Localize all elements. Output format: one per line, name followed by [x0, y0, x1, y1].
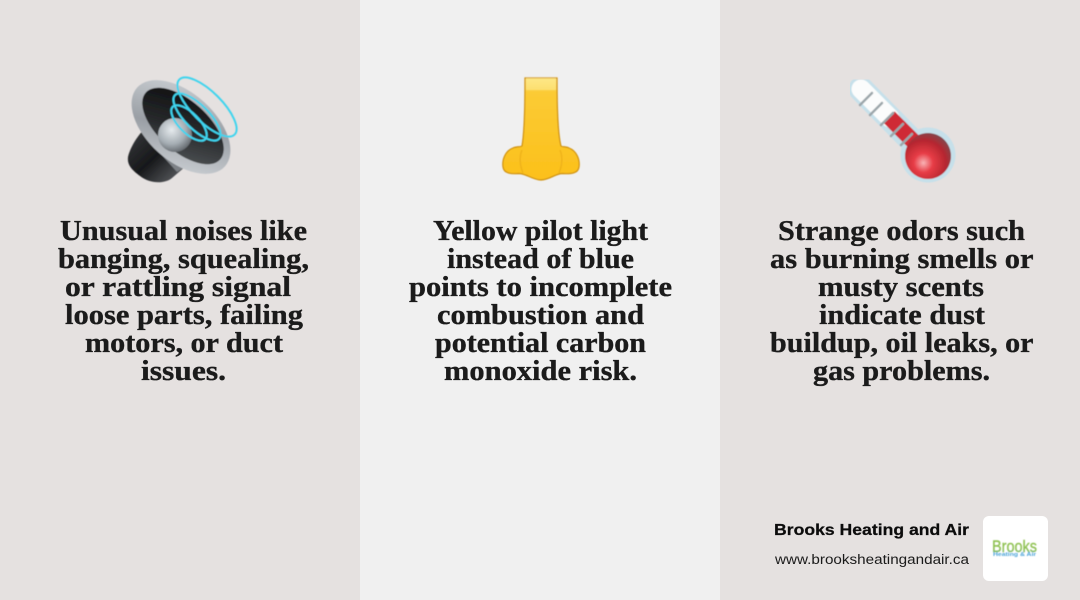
heading: odors text: gas problems. [813, 355, 990, 387]
heading: pilot light text: Yellow pilot light [433, 215, 648, 247]
heading: odors text: as burning smells or [770, 243, 1034, 275]
heading: noises text: issues. [141, 355, 226, 387]
brand name: Brooks Heating and Air [774, 522, 969, 539]
heading: odors text: Strange odors such [778, 215, 1025, 247]
logo: Heating & Air [993, 552, 1036, 558]
logo [983, 516, 1048, 581]
panel: yellow pilot light [360, 0, 720, 600]
logo: Brooks [992, 537, 1037, 556]
icon: nose [503, 78, 579, 180]
heading: noises text: loose parts, failing [65, 299, 304, 331]
icon: thermometer [860, 89, 956, 182]
heading: odors text: buildup, oil leaks, or [770, 327, 1034, 359]
heading: pilot light text: potential carbon [435, 327, 646, 359]
brand footer [774, 516, 1048, 581]
heading: pilot light text: combustion and [437, 299, 644, 331]
icon: speaker [114, 62, 248, 192]
heading: noises text: motors, or duct [85, 327, 283, 359]
heading: noises text: Unusual noises like [60, 215, 307, 247]
website: www.brooksheatingandair.ca [774, 552, 970, 567]
heading: pilot light text: instead of blue [447, 243, 634, 275]
heading: pilot light text: monoxide risk. [444, 355, 637, 387]
heading: noises text: or rattling signal [65, 271, 291, 303]
heading: pilot light text: points to incomplete [409, 271, 672, 303]
heading: odors text: indicate dust [819, 299, 985, 331]
panel: strange odors [720, 0, 1080, 600]
heading: noises text: banging, squealing, [58, 243, 309, 275]
panel: unusual noises [0, 0, 360, 600]
heading: odors text: musty scents [818, 271, 984, 303]
